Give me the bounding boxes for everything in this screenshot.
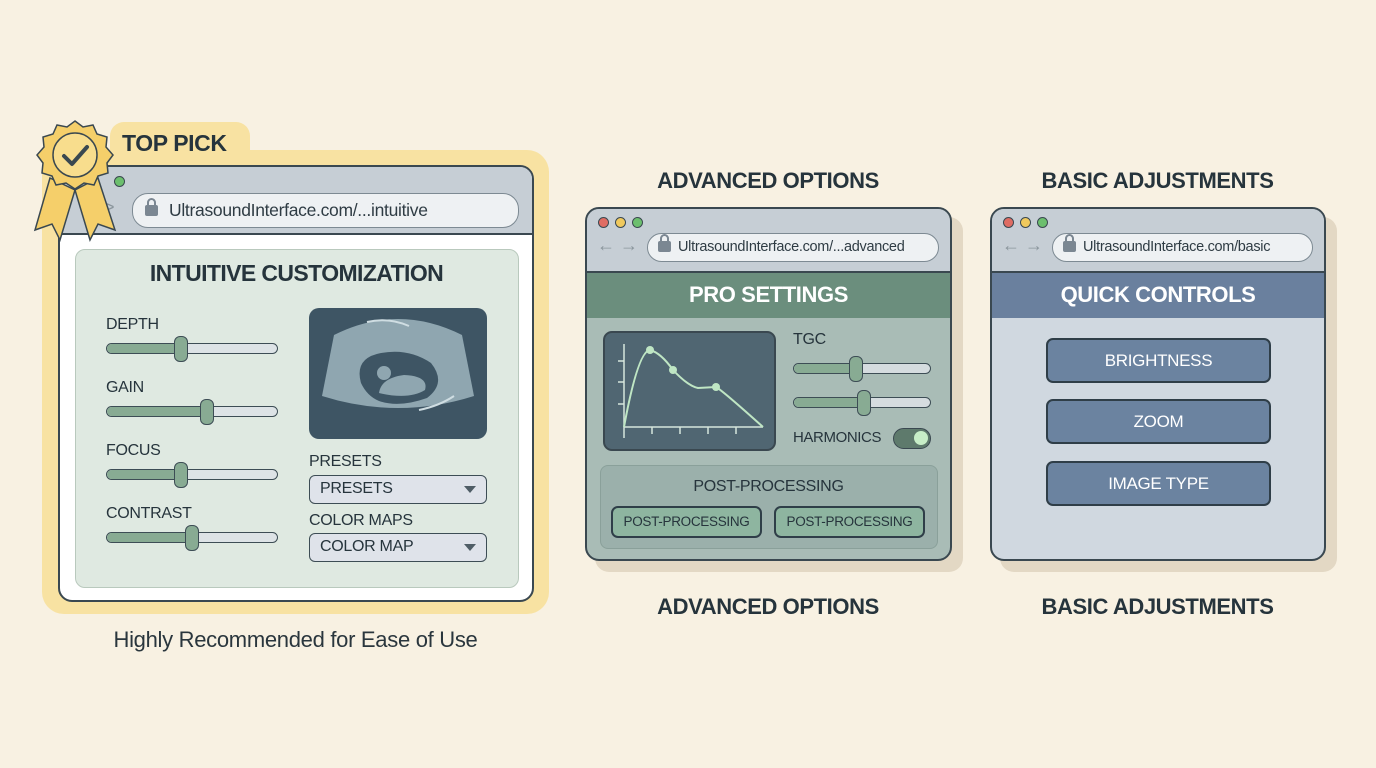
caption: Highly Recommended for Ease of Use — [114, 627, 477, 652]
label: tgc: TGC — [793, 331, 826, 348]
dropdown: presets: PRESETS — [320, 480, 393, 497]
url bar — [647, 233, 939, 262]
dropdown: color maps — [309, 512, 487, 562]
window shadow — [595, 217, 963, 572]
slider: depth: DEPTH — [106, 316, 159, 333]
highlight frame: top pick — [42, 122, 549, 614]
window: basic — [990, 207, 1326, 561]
slider: focus — [106, 442, 278, 488]
slider: contrast — [106, 505, 278, 551]
browser bar: ← → — [597, 235, 638, 255]
browser bar — [587, 209, 950, 271]
header: quick controls — [992, 271, 1324, 318]
panel: post-processing: POST-PROCESSING — [786, 514, 913, 529]
slider: contrast: CONTRAST — [106, 505, 192, 522]
heading: INTUITIVE CUSTOMIZATION — [150, 260, 443, 286]
window shadow — [1000, 217, 1337, 572]
window: intuitive — [58, 165, 534, 602]
slider: depth — [106, 316, 278, 362]
button: zoom — [1046, 399, 1271, 444]
window: advanced — [585, 207, 952, 561]
heading: basic adjustments top: BASIC ADJUSTMENTS — [1042, 168, 1273, 193]
toggle: harmonics — [793, 428, 931, 449]
chart: tgc curve — [603, 331, 776, 451]
header: quick controls: QUICK CONTROLS — [1061, 282, 1255, 307]
dropdown: presets: PRESETS — [309, 453, 382, 470]
button: brightness: BRIGHTNESS — [1105, 351, 1212, 370]
slider: tgc 1 — [793, 363, 931, 374]
slider: gain: GAIN — [106, 379, 144, 396]
browser bar: ← → — [1002, 235, 1043, 255]
button: zoom: ZOOM — [1134, 412, 1183, 431]
heading: basic adjustments bottom: BASIC ADJUSTMENTS — [1042, 594, 1273, 619]
dropdown: color maps: COLOR MAPS — [309, 512, 413, 529]
header: pro settings: PRO SETTINGS — [689, 282, 848, 307]
url bar: UltrasoundInterface.com/...advanced — [678, 239, 904, 255]
button: image type — [1046, 461, 1271, 506]
browser bar — [992, 209, 1324, 271]
slider: gain — [106, 379, 278, 425]
label: TOP PICK: TOP PICK — [122, 130, 227, 156]
panel: post-processing — [600, 465, 938, 549]
heading: advanced options bottom: ADVANCED OPTIONS — [657, 594, 879, 619]
url bar — [132, 193, 519, 228]
url bar: UltrasoundInterface.com/basic — [1083, 239, 1270, 255]
dropdown: color maps: COLOR MAP — [320, 538, 413, 555]
url bar — [1052, 233, 1313, 262]
browser bar: > — [104, 197, 115, 217]
panel: post-processing: POST-PROCESSING — [623, 514, 750, 529]
toggle: harmonics: HARMONICS — [793, 429, 881, 446]
button: image type: IMAGE TYPE — [1108, 474, 1209, 493]
slider: tgc 2 — [793, 397, 931, 408]
slider: focus: FOCUS — [106, 442, 161, 459]
heading: advanced options top: ADVANCED OPTIONS — [657, 168, 879, 193]
panel: post-processing: POST-PROCESSING — [693, 478, 844, 495]
ultrasound image — [309, 308, 487, 439]
dropdown: presets — [309, 453, 487, 504]
panel: intuitive customization — [75, 249, 519, 588]
url bar: UltrasoundInterface.com/...intuitive — [169, 200, 428, 220]
button: brightness — [1046, 338, 1271, 383]
icon: award ribbon badge — [34, 120, 116, 242]
browser bar — [60, 167, 532, 235]
header: pro settings — [587, 271, 950, 318]
